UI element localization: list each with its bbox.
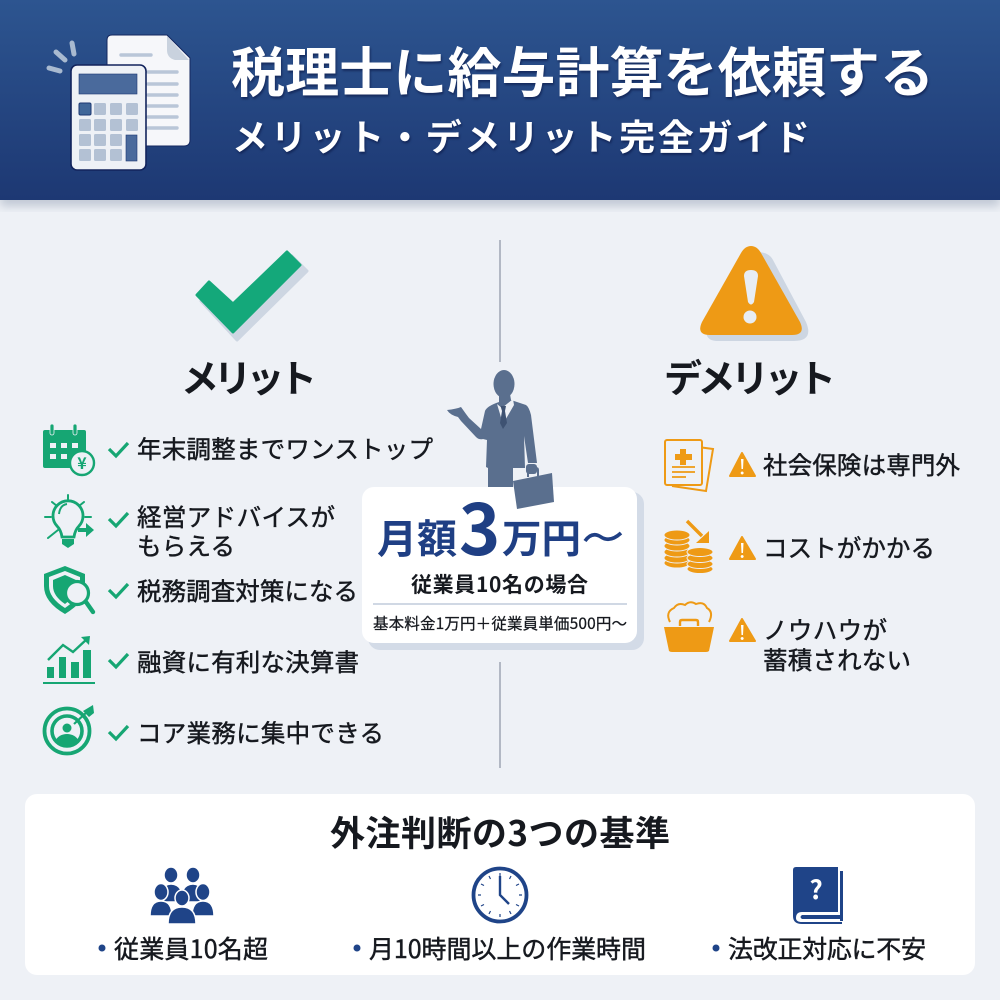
price: 万円	[502, 508, 581, 565]
panel: three criteria	[25, 794, 975, 975]
price	[377, 475, 621, 576]
center divider: lower	[499, 662, 501, 768]
icon: people	[150, 867, 214, 924]
icon: calendar yen	[43, 424, 94, 475]
panel: merits	[43, 252, 434, 754]
subtitle: メリット・デメリット完全ガイド	[232, 109, 810, 161]
text: 法改正対応に不安	[728, 930, 926, 966]
demerit row: cost	[664, 521, 935, 574]
bullet	[712, 944, 720, 952]
merit row: year-end adjustment	[43, 424, 434, 475]
heading: merits: メリット	[181, 348, 317, 403]
text: 年末調整までワンストップ	[137, 431, 434, 466]
icon: check	[109, 584, 128, 597]
text: 蓄積されない	[763, 642, 911, 677]
merit row: tax audit	[44, 566, 358, 614]
merit row: core business	[44, 705, 384, 754]
panel: demerits	[664, 246, 960, 677]
text: ノウハウが	[763, 612, 887, 647]
icon: briefcase	[513, 468, 554, 509]
icon: calculator and document	[49, 35, 190, 170]
price: 3	[459, 475, 500, 576]
icon: caution	[730, 619, 755, 641]
merit row: financing	[43, 636, 359, 684]
icon: check	[109, 513, 128, 526]
icon: coins with arrow	[664, 521, 713, 574]
merit row: management advice	[45, 495, 335, 563]
icon: light bulb	[45, 495, 94, 548]
price: 月額	[377, 507, 457, 565]
criteria heading: 外注判断の3つの基準	[330, 806, 670, 857]
icon: large green check	[197, 252, 307, 340]
rule	[373, 603, 627, 605]
icon: caution	[730, 453, 755, 476]
criterion: working hours	[354, 868, 646, 966]
bullet	[98, 944, 106, 952]
title: 税理士に給与計算を依頼する	[231, 29, 934, 108]
criterion: legal changes	[712, 867, 926, 966]
bullet	[354, 944, 360, 952]
price card	[362, 468, 644, 650]
icon: caution	[730, 537, 755, 559]
icon: check	[109, 726, 128, 739]
icon: calendar yen: ¥	[77, 450, 87, 474]
text: 融資に有利な決算書	[137, 644, 359, 679]
header banner	[0, 0, 1000, 200]
text: 税務調査対策になる	[137, 573, 358, 608]
icon: question book	[793, 867, 843, 924]
icon: target with person	[44, 705, 94, 754]
center divider: upper	[499, 240, 501, 362]
text: もらえる	[137, 528, 235, 563]
icon: clock	[474, 868, 526, 922]
icon: question book: ?	[809, 870, 823, 907]
demerit row: social insurance	[665, 440, 960, 491]
heading: demerits: デメリット	[664, 348, 836, 403]
text: コア業務に集中できる	[137, 715, 384, 750]
text	[763, 612, 911, 677]
price breakdown: 基本料金1万円＋従業員単価500円～	[373, 612, 627, 634]
criterion: employees	[98, 867, 268, 966]
icon: medical documents	[665, 440, 713, 491]
text: 経営アドバイスが	[137, 499, 335, 534]
price condition: 従業員10名の場合	[411, 569, 588, 599]
icon: shield and magnifier	[44, 566, 93, 614]
text	[137, 499, 335, 563]
icon: check	[109, 443, 128, 456]
text: 月10時間以上の作業時間	[369, 930, 646, 966]
icon: check	[109, 654, 128, 667]
text: 社会保険は専門外	[763, 447, 960, 482]
icon: cloud and briefcase	[664, 602, 714, 652]
businessman figure	[447, 370, 537, 490]
text: 従業員10名超	[114, 930, 268, 966]
icon: large warning triangle	[700, 246, 808, 341]
icon: growth chart	[43, 636, 95, 684]
demerit row: know-how	[664, 602, 911, 677]
text: コストがかかる	[763, 530, 935, 565]
